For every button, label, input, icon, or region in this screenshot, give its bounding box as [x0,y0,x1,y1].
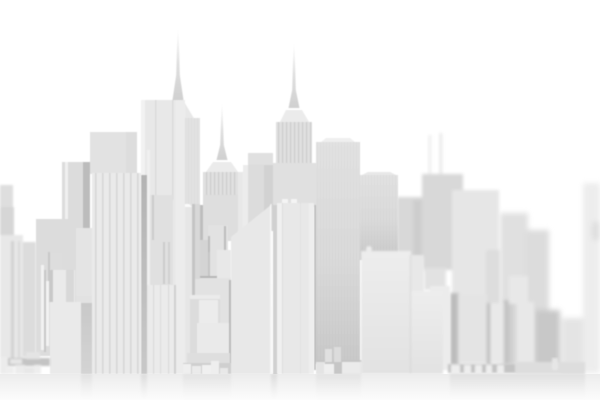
small blocks [8,358,50,366]
tower: spire left [200,100,243,280]
right mid-ground towers [397,133,534,366]
tower: stepped small top [248,153,273,166]
tower: far left slab [62,162,90,230]
building: rounded front tower [277,199,314,374]
left background towers [36,132,141,374]
ground with reflections [0,374,600,400]
twin antennas [429,133,442,177]
building: slanted roof tower [231,205,271,374]
tower: tall spire tower [141,26,200,374]
tower: ribbed foreground [92,173,141,374]
small blocks [316,347,362,375]
small blurred blocks right [448,358,585,376]
building: stepped low block [183,280,232,374]
stepped block behind slanted tower [193,225,231,356]
far-left blurred towers [0,185,50,374]
tower: mid slab [273,163,316,207]
tower: spire right [276,40,312,163]
tower: rounded top block [90,132,137,174]
foreground right blocks [361,246,450,374]
tower: tall central slab [316,142,360,364]
foreground centre buildings [183,199,362,375]
tower: back right [360,175,398,260]
back centre towers [141,26,398,375]
block: front large [410,255,424,291]
right blurred skyline background [500,183,600,373]
block: low foreground [50,302,81,374]
